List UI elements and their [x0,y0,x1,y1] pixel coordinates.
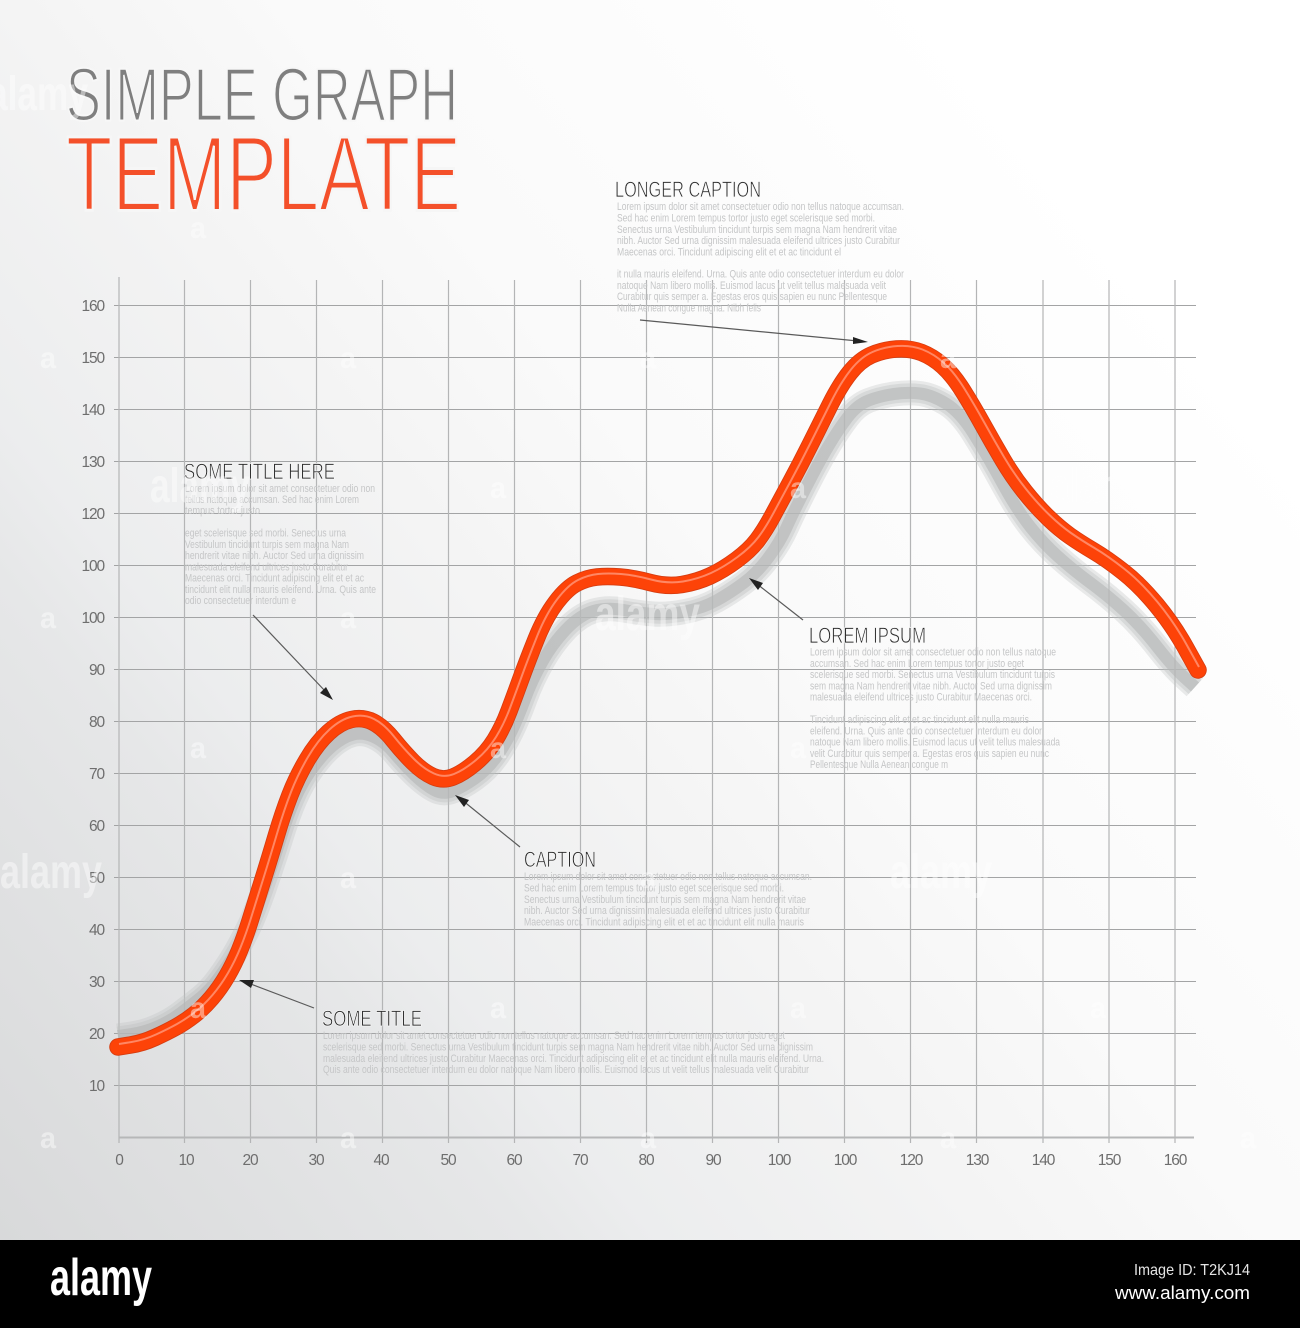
y axis labels: 50 [89,870,105,887]
watermarks: a [940,1122,956,1155]
x axis labels: 60 [506,1152,523,1169]
watermarks: alamy [890,846,992,899]
x axis labels: 120 [900,1152,924,1169]
watermarks: alamy [595,588,700,641]
footer bar [0,1240,1300,1328]
title: TEMPLATE [66,114,461,234]
arrow: caption [455,795,520,847]
x axis labels: 50 [440,1152,457,1169]
x axis labels: 160 [1164,1152,1188,1169]
x axis labels: 100 [834,1152,858,1169]
callout: lorem ipsum: velit Curabitur quis semper a. Egestas eros quis sapien eu nunc [810,748,1049,760]
website: www.alamy.com [1114,1283,1250,1303]
callout: longer caption: Nulla Aenean congue magna. Nibh felis [617,302,761,314]
x axis labels: 100 [768,1152,792,1169]
y axis labels: 160 [81,298,105,315]
callout: longer caption: Sed hac enim Lorem tempus tortor justo eget scelerisque sed morbi. [617,212,875,224]
watermarks: a [40,1122,56,1155]
image id: Image ID: T2KJ14 [1134,1262,1250,1279]
callout: lorem ipsum: accumsan. Sed hac enim Lorem tempus tortor justo eget [810,658,1024,670]
arrow: some title here [253,615,333,700]
x axis labels: 150 [1098,1152,1122,1169]
chart grid [114,277,1196,1143]
x axis labels: 90 [705,1152,722,1169]
callout: longer caption: Lorem ipsum dolor sit amet consectetuer odio non tellus natoque accumsan. [617,201,904,213]
x axis labels: 10 [178,1152,195,1169]
callout: some title here: SOME TITLE HERE [184,459,335,484]
watermarks: a [790,732,806,765]
callout: lorem ipsum: eleifend. Urna. Quis ante odio consectetuer interdum eu dolor [810,726,1042,738]
x axis labels: 20 [242,1152,259,1169]
callout: some title here: tempus tortor justo [185,505,260,517]
title [66,52,461,234]
callout: some title: Lorem ipsum dolor sit amet consectetuer odio non tellus natoque accumsan. Sed hac enim Lorem tempus tortor justo eget [323,1030,785,1042]
watermarks: a [490,472,506,505]
watermarks: a [490,732,506,765]
y axis labels: 100 [81,558,105,575]
watermarks: a [940,342,956,375]
watermarks: a [340,1122,356,1155]
watermarks: a [190,732,206,765]
watermarks: alamy [0,846,102,899]
callout: caption: CAPTION [524,847,596,872]
watermarks: a [790,472,806,505]
callout: some title here: tellus natoque accumsan. Sed hac enim Lorem [185,494,359,506]
watermarks: alamy [1050,460,1150,513]
callout: some title here: hendrerit vitae nibh. Auctor Sed urna dignissim [185,550,364,562]
watermarks: a [640,342,656,375]
callout: longer caption [615,177,904,314]
callout: longer caption: Curabitur quis semper a. Egestas eros quis sapien eu nunc Pellentesque [617,291,887,303]
callout: some title here: Vestibulum tincidunt turpis sem magna Nam [185,539,349,551]
callout: longer caption: it nulla mauris eleifend. Urna. Quis ante odio consectetuer interdum eu dolor [617,268,904,280]
callout: lorem ipsum: Lorem ipsum dolor sit amet consectetuer odio non tellus natoque [810,646,1056,658]
callout: some title here [184,459,376,607]
callout: lorem ipsum: Pellentesque Nulla Aenean congue m [810,759,948,771]
arrow: lorem ipsum [749,578,803,620]
callout: some title: Quis ante odio consectetuer interdum eu dolor natoque Nam libero mollis. Euismod lacus ut velit tellus malesuada velit Curabitur [323,1064,809,1076]
x axis labels: 30 [308,1152,325,1169]
watermarks: alamy [150,460,250,513]
callout: lorem ipsum: natoque Nam libero mollis. Euismod lacus ut velit tellus malesuada [810,736,1061,748]
callout: some title: scelerisque sed morbi. Senectus urna Vestibulum tincidunt turpis sem magna Nam hendrerit vitae nibh. Auctor Sed urna dignissim [323,1042,813,1054]
y axis labels: 10 [89,1078,105,1095]
watermarks [0,68,1256,1155]
watermarks: a [40,602,56,635]
callout: some title here: odio consectetuer interdum e [185,595,296,607]
x axis labels: 80 [638,1152,655,1169]
x axis labels: 40 [373,1152,390,1169]
watermarks: a [790,992,806,1025]
callout: longer caption: Senectus urna Vestibulum tincidunt turpis sem magna Nam hendrerit vitae [617,224,897,236]
y axis labels: 100 [81,610,105,627]
watermarks: a [1240,1122,1256,1155]
x axis labels: 70 [572,1152,589,1169]
callout: caption: Senectus urna Vestibulum tincidunt turpis sem magna Nam hendrerit vitae [524,894,806,906]
watermarks: a [340,862,356,895]
callout: longer caption: nibh. Auctor Sed urna dignissim malesuada eleifend ultrices justo Curabitur [617,235,900,247]
callout: caption: Lorem ipsum dolor sit amet consectetuer odio non tellus natoque accumsan. [524,871,812,883]
watermarks: a [340,602,356,635]
y axis labels: 150 [81,350,105,367]
callout: lorem ipsum: scelerisque sed morbi. Senectus urna Vestibulum tincidunt turpis [810,669,1055,681]
watermarks: a [1090,992,1106,1025]
title: SIMPLE GRAPH [66,52,458,136]
red curve [118,346,1199,1047]
callout: caption: Sed hac enim Lorem tempus tortor justo eget scelerisque sed morbi. [524,882,784,894]
y axis labels: 60 [89,818,105,835]
callout: some title: SOME TITLE [322,1006,422,1031]
callout: longer caption: Maecenas orci. Tincidunt adipiscing elit et et ac tincidunt el [617,246,841,258]
callout: some title here: malesuada eleifend ultrices justo Curabitur [185,562,348,574]
arrow: some title [239,980,314,1008]
y axis labels [81,298,105,1095]
x axis labels: 140 [1032,1152,1056,1169]
callout: caption: Maecenas orci. Tincidunt adipiscing elit et et ac tincidunt elit nulla mauris [524,916,804,928]
y axis labels: 80 [89,714,105,731]
callout: some title [322,1006,824,1076]
callout: some title here: eget scelerisque sed morbi. Senectus urna [185,528,347,540]
callout: caption [524,847,812,928]
callout: longer caption: LONGER CAPTION [615,177,761,202]
x axis labels [115,1152,1188,1169]
arrow: longer caption [640,320,868,344]
curve shadow [118,393,1195,1036]
y axis labels: 30 [89,974,105,991]
y axis labels: 40 [89,922,105,939]
y axis labels: 130 [81,454,105,471]
watermarks: a [640,1122,656,1155]
watermarks: a [190,992,206,1025]
watermarks: a [490,992,506,1025]
y axis labels: 20 [89,1026,105,1043]
watermarks: a [640,862,656,895]
callout: some title: malesuada eleifend ultrices justo Curabitur Maecenas orci. Tincidunt adipiscing elit et et ac tincidunt elit nulla mauris eleifend. Urna. [323,1053,824,1065]
y axis labels: 90 [89,662,105,679]
callout: lorem ipsum [809,623,1061,771]
footer logo: alamy [50,1249,152,1307]
callout: longer caption: natoque Nam libero mollis. Euismod lacus ut velit tellus malesuada velit [617,280,886,292]
x axis labels: 0 [115,1152,124,1169]
callout: lorem ipsum: malesuada eleifend ultrices justo Curabitur Maecenas orci. [810,692,1032,704]
callout: caption: nibh. Auctor Sed urna dignissim malesuada eleifend ultrices justo Curabitur [524,905,810,917]
watermarks: a [340,342,356,375]
watermarks: a [190,212,206,245]
y axis labels: 140 [81,402,105,419]
watermarks: a [40,342,56,375]
callout: some title here: tincidunt elit nulla mauris eleifend. Urna. Quis ante [185,584,376,596]
callout: lorem ipsum: sem magna Nam hendrerit vitae nibh. Auctor Sed urna dignissim [810,680,1052,692]
callout: lorem ipsum: Tincidunt adipiscing elit et et ac tincidunt elit nulla mauris [810,714,1029,726]
y axis labels: 120 [81,506,105,523]
callout: some title here: Maecenas orci. Tincidunt adipiscing elit et et ac [185,572,364,584]
callout: lorem ipsum: LOREM IPSUM [809,623,926,648]
y axis labels: 70 [89,766,105,783]
callout: some title here: Lorem ipsum dolor sit amet consectetuer odio non [185,483,375,495]
x axis labels: 130 [966,1152,990,1169]
